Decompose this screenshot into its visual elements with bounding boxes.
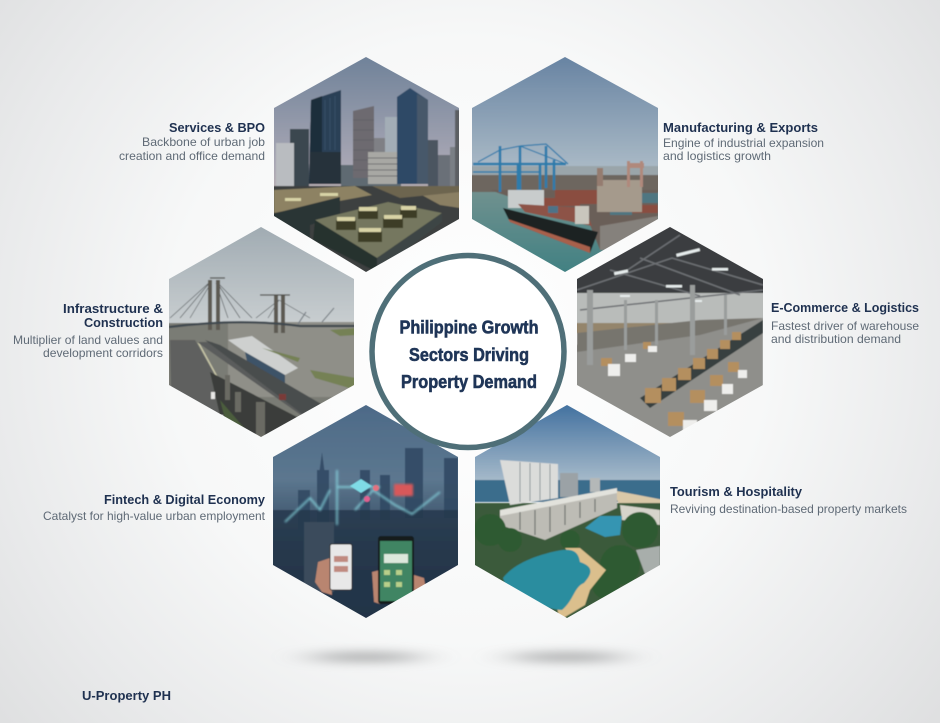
label: Infrastructure & Construction: Construction (84, 315, 163, 330)
label: Manufacturing & Exports (663, 120, 824, 163)
label: Manufacturing & Exports: and logistics growth (663, 149, 771, 163)
hexagon photo: bridge and highway construction (165, 225, 357, 439)
label: E-Commerce & Logistics: and distribution demand (771, 332, 901, 346)
hexagon photo: city skyline with rooftop terraces (270, 55, 462, 276)
label: Infrastructure & Construction: Infrastructure & (63, 301, 163, 316)
brand footer: U-Property PH (82, 688, 171, 703)
label: E-Commerce & Logistics (771, 300, 919, 346)
label: Infrastructure & Construction (13, 301, 163, 360)
floor shadows (308, 652, 625, 662)
title (400, 318, 538, 392)
central circle badge (372, 256, 564, 448)
label: Infrastructure & Construction: development corridors (43, 346, 163, 360)
label: Manufacturing & Exports: Manufacturing & Exports (663, 120, 818, 135)
label: Fintech & Digital Economy: Fintech & Digital Economy (104, 492, 266, 507)
label: E-Commerce & Logistics: E-Commerce & Logistics (771, 300, 919, 315)
label: Services & BPO: creation and office demand (119, 149, 265, 163)
label: Tourism & Hospitality (670, 484, 907, 516)
hexagon photo: container port (470, 55, 662, 276)
label: Services & BPO (119, 120, 265, 163)
label: Services & BPO: Services & BPO (169, 120, 265, 135)
hexagon photo: fintech city and phones (270, 403, 462, 621)
title: Philippine Growth (400, 318, 538, 338)
title: Sectors Driving (409, 345, 529, 365)
label: Manufacturing & Exports: Engine of industrial expansion (663, 136, 824, 150)
label: Infrastructure & Construction: Multiplier of land values and (13, 333, 163, 347)
label: Fintech & Digital Economy (43, 492, 266, 523)
label: Tourism & Hospitality: Tourism & Hospitality (670, 484, 803, 499)
label: Fintech & Digital Economy: Catalyst for high-value urban employment (43, 509, 266, 523)
label: Services & BPO: Backbone of urban job (142, 135, 265, 149)
hexagon photo: warehouse interior (575, 225, 767, 440)
title: Property Demand (401, 372, 537, 392)
hexagon photo: beach resort and pool (472, 403, 664, 620)
label: E-Commerce & Logistics: Fastest driver of warehouse (771, 319, 919, 333)
label: Tourism & Hospitality: Reviving destination-based property markets (670, 502, 907, 516)
